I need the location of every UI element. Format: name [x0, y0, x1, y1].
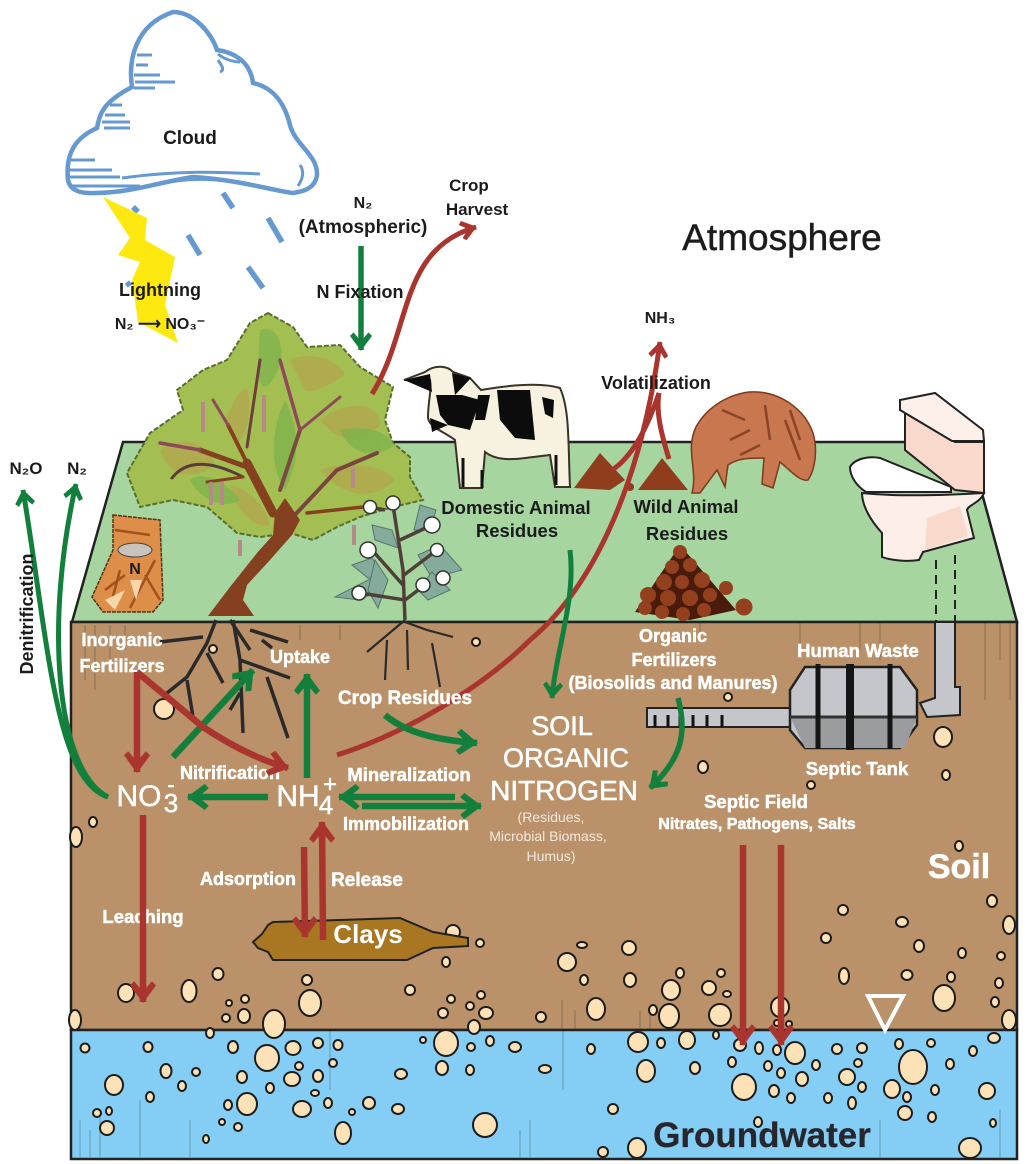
crop harvest label: Crop — [449, 176, 489, 195]
icon: water table triangle — [868, 996, 903, 1030]
label: volatilization: Volatilization — [601, 373, 711, 393]
tree hanging twigs — [203, 395, 354, 556]
icon: pig — [691, 392, 815, 493]
N fixation label: N Fixation — [316, 282, 404, 302]
label: nitrate: - — [167, 772, 175, 797]
soil labels: Inorganic — [81, 630, 163, 650]
icon: cloud — [68, 12, 317, 193]
panel: soil layer — [71, 622, 1017, 1030]
cloud label: Cloud — [163, 128, 217, 149]
label: nitrate — [116, 772, 178, 818]
soil labels: Uptake — [270, 647, 330, 667]
surface residue labels — [441, 496, 739, 544]
heading: groundwater: Groundwater — [653, 1116, 871, 1155]
soil labels: Fertilizers — [631, 650, 717, 670]
gas labels: N₂ — [67, 459, 87, 478]
icon: cow — [404, 367, 570, 488]
icon: tree — [127, 313, 423, 616]
heading: atmosphere: Atmosphere — [682, 217, 882, 258]
N2 atmospheric label — [299, 195, 427, 238]
soil and water speckle streaks — [80, 622, 1010, 1157]
dashed pipe from toilet — [936, 555, 955, 622]
icon: roots — [160, 620, 453, 738]
soil labels: (Biosolids and Manures) — [568, 673, 778, 693]
surface residue labels: Residues — [646, 523, 728, 544]
rain streaks — [127, 193, 282, 288]
label: soil organic nitrogen: NITROGEN — [490, 775, 638, 806]
label: ammonium: + — [323, 771, 337, 798]
label: soil organic nitrogen details: Microbial Biomass, — [489, 828, 607, 844]
soil labels: Release — [331, 870, 403, 891]
icon: cotton plant — [335, 496, 462, 620]
label: ammonium — [276, 771, 337, 820]
soil labels: Immobilization — [343, 814, 469, 834]
icon: fertilizer bag — [92, 515, 163, 612]
denitrification label: Denitrification — [17, 553, 37, 675]
surface residue labels: Wild Animal — [633, 496, 739, 517]
soil labels: Human Waste — [797, 640, 919, 661]
panel: groundwater layer — [71, 1030, 1017, 1159]
soil labels: Septic Field — [704, 791, 808, 812]
label: soil organic nitrogen — [490, 711, 638, 806]
crop harvest label — [446, 176, 509, 219]
tree foliage patches — [160, 356, 395, 526]
arrow: crop harvest — [372, 227, 476, 394]
soil labels: Adsorption — [200, 869, 296, 889]
icon: clay deposit — [253, 918, 468, 960]
label: soil organic nitrogen details — [489, 809, 607, 864]
green soil arrows — [173, 550, 682, 806]
cloud hatching — [68, 54, 270, 188]
soil labels: Leaching — [102, 906, 184, 927]
lightning label: Lightning — [119, 280, 201, 300]
label: soil organic nitrogen: SOIL — [531, 711, 593, 741]
gas labels: N₂O — [9, 459, 43, 478]
label: soil organic nitrogen details: (Residues, — [518, 809, 584, 825]
soil labels: Organic — [639, 626, 707, 646]
clays label: Clays — [333, 919, 403, 949]
icon: toilet — [850, 393, 984, 561]
lightning label: N₂ ⟶ NO₃⁻ — [115, 316, 205, 333]
label: soil organic nitrogen details: Humus) — [526, 848, 576, 864]
crop harvest label: Harvest — [446, 200, 509, 219]
surface residue labels: Domestic Animal — [441, 497, 591, 518]
soil labels: Crop Residues — [338, 688, 472, 709]
red soil arrows — [137, 672, 781, 1045]
arrow: N fixation — [358, 246, 364, 350]
icon: manure piles on surface — [574, 453, 752, 621]
soil labels — [79, 626, 990, 927]
label: ammonium: 4 — [319, 790, 333, 820]
arrow: N2 denitrification — [59, 484, 108, 797]
label: NH3: NH₃ — [645, 310, 675, 327]
pebbles in soil and water — [69, 638, 1016, 1158]
soil labels: Nitrates, Pathogens, Salts — [658, 816, 856, 833]
panel: land surface — [72, 442, 1017, 622]
surface residue labels: Residues — [476, 520, 558, 541]
arrow: N2O denitrification — [23, 490, 108, 797]
soil labels: Fertilizers — [79, 656, 165, 676]
icon: fertilizer bag: N — [129, 561, 141, 578]
soil labels: Mineralization — [347, 764, 471, 785]
tree branches — [160, 360, 377, 517]
gas labels — [9, 459, 87, 478]
N2 atmospheric label: N₂ — [354, 195, 372, 212]
label: soil organic nitrogen: ORGANIC — [503, 743, 629, 773]
lightning label — [115, 280, 205, 333]
N2 atmospheric label: (Atmospheric) — [299, 217, 427, 238]
label: nitrate: 3 — [164, 788, 178, 818]
soil labels: Nitrification — [180, 763, 280, 783]
label: ammonium: NH — [276, 780, 320, 813]
label: nitrate: NO — [116, 780, 162, 813]
soil labels: Septic Tank — [806, 758, 909, 779]
soil labels: Soil — [928, 848, 990, 886]
icon: septic tank — [647, 622, 960, 750]
arrows: volatilization — [337, 342, 669, 755]
tree trunk — [208, 498, 300, 616]
icon: lightning bolt — [103, 197, 178, 343]
